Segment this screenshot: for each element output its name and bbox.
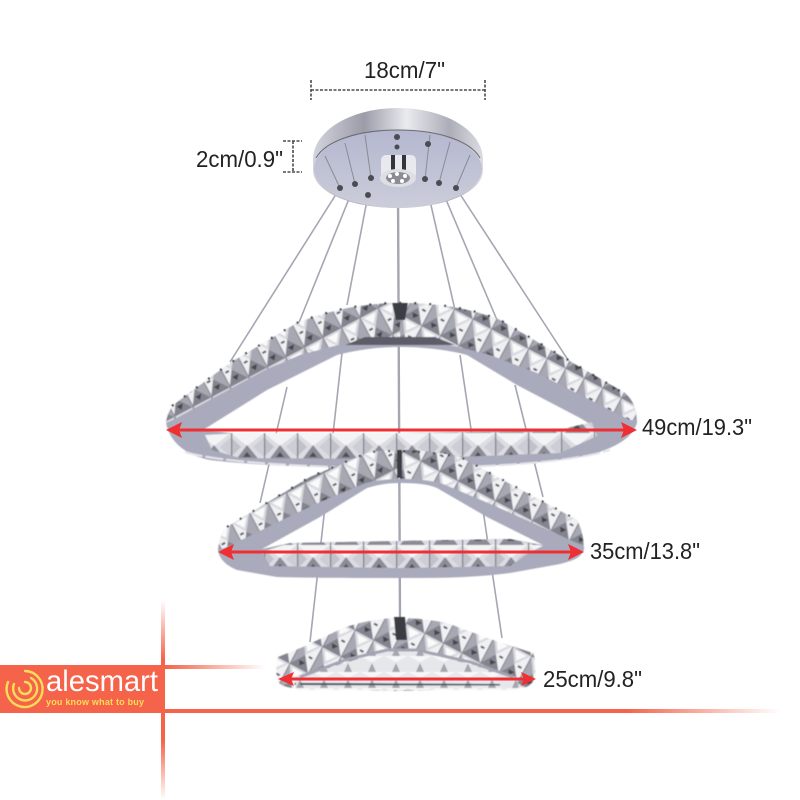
watermark lines [161, 600, 780, 800]
bottom fringe [185, 450, 610, 468]
arrow: bottom ring width [278, 672, 536, 686]
crystals left [218, 450, 400, 550]
dark centre crystals [392, 303, 408, 320]
edge studs [227, 451, 577, 527]
logo banner [0, 665, 165, 713]
label: middle ring width: 35cm/13.8" [590, 538, 700, 564]
middle ring [218, 450, 584, 578]
crystals right [400, 450, 583, 545]
metal band [218, 450, 584, 578]
lower crystals [205, 422, 597, 459]
metal inner edge [300, 650, 513, 677]
arrow: middle ring width [218, 544, 584, 560]
label: bottom ring width: 25cm/9.8" [543, 666, 642, 692]
dimension: canopy height [283, 141, 302, 172]
crystals front [262, 539, 543, 568]
bottom ring [276, 617, 536, 691]
LED holder [380, 155, 416, 187]
edge studs [172, 303, 630, 406]
front pane [296, 650, 518, 690]
top ring [166, 303, 637, 468]
metal band [166, 303, 637, 468]
suspension wires [230, 179, 570, 642]
brand name: alesmart [46, 665, 159, 698]
label: top ring width: 49cm/19.3" [642, 414, 752, 440]
upper crystals [166, 303, 400, 423]
label: canopy height: 2cm/0.9" [196, 146, 283, 172]
label: canopy width: 18cm/7" [364, 57, 445, 83]
canopy ceiling plate [313, 108, 483, 208]
dimension: canopy width [311, 80, 485, 100]
icon: spiral [7, 671, 43, 707]
tagline: you know what to buy [46, 697, 144, 707]
arrow: top ring width [166, 422, 637, 438]
canopy wire stubs and fixtures [325, 135, 470, 188]
